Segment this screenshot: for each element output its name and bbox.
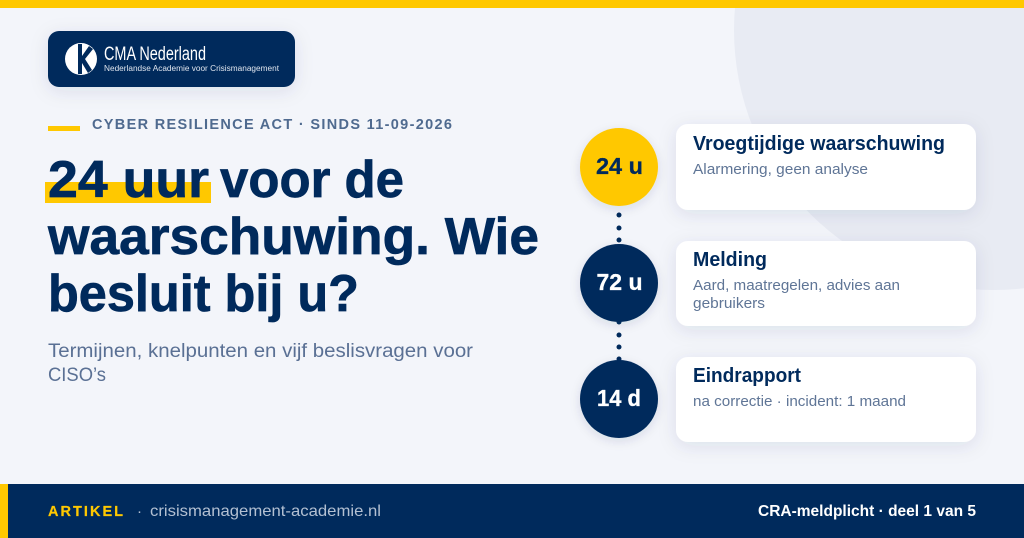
title: voor de xyxy=(220,151,404,209)
icon: K logo xyxy=(65,43,97,75)
step 1: 24 u badge: 24 u xyxy=(596,153,643,179)
subtitle xyxy=(48,341,474,386)
step 3: 14 d badge: 14 d xyxy=(597,385,641,411)
title xyxy=(45,151,539,323)
footer bar: ARTIKEL xyxy=(48,504,123,520)
step 2: card: gebruikers xyxy=(693,295,765,312)
title: besluit bij u? xyxy=(48,265,359,323)
logo: CMA Nederland: CMA Nederland xyxy=(104,44,206,65)
step 3: card: Eindrapport xyxy=(693,365,801,387)
timeline connectors xyxy=(616,212,622,362)
logo: CMA Nederland xyxy=(48,31,295,87)
eyebrow: CYBER RESILIENCE ACT · SINDS 11-09-2026 xyxy=(92,117,452,133)
title: waarschuwing. Wie xyxy=(47,208,539,266)
step 2: card xyxy=(676,241,976,326)
step 1: card: Alarmering, geen analyse xyxy=(693,161,868,178)
footer bar: CRA-meldplicht · deel 1 van 5 xyxy=(758,503,976,520)
step 3: 14 d badge xyxy=(580,360,658,438)
logo: CMA Nederland: Nederlandse Academie voor Crisismanagement xyxy=(104,64,280,73)
step 1: card: Vroegtijdige waarschuwing xyxy=(693,133,945,155)
footer bar: crisismanagement-academie.nl xyxy=(150,503,381,520)
subtitle: CISO’s xyxy=(48,365,106,386)
step 1: card xyxy=(676,124,976,210)
step 1: 24 u badge xyxy=(580,128,658,206)
title: 24 uur xyxy=(48,151,209,209)
footer bar xyxy=(0,484,1024,538)
step 2: card: Melding xyxy=(693,249,767,271)
step 2: card: Aard, maatregelen, advies aan xyxy=(693,277,900,294)
top accent bar xyxy=(0,0,1024,8)
step 3: card xyxy=(676,357,976,442)
footer bar: · xyxy=(137,503,142,520)
subtitle: Termijnen, knelpunten en vijf beslisvragen voor xyxy=(48,341,474,362)
step 3: card: na correctie · incident: 1 maand xyxy=(693,393,906,410)
step 2: 72 u badge xyxy=(580,244,658,322)
step 2: 72 u badge: 72 u xyxy=(596,269,642,295)
